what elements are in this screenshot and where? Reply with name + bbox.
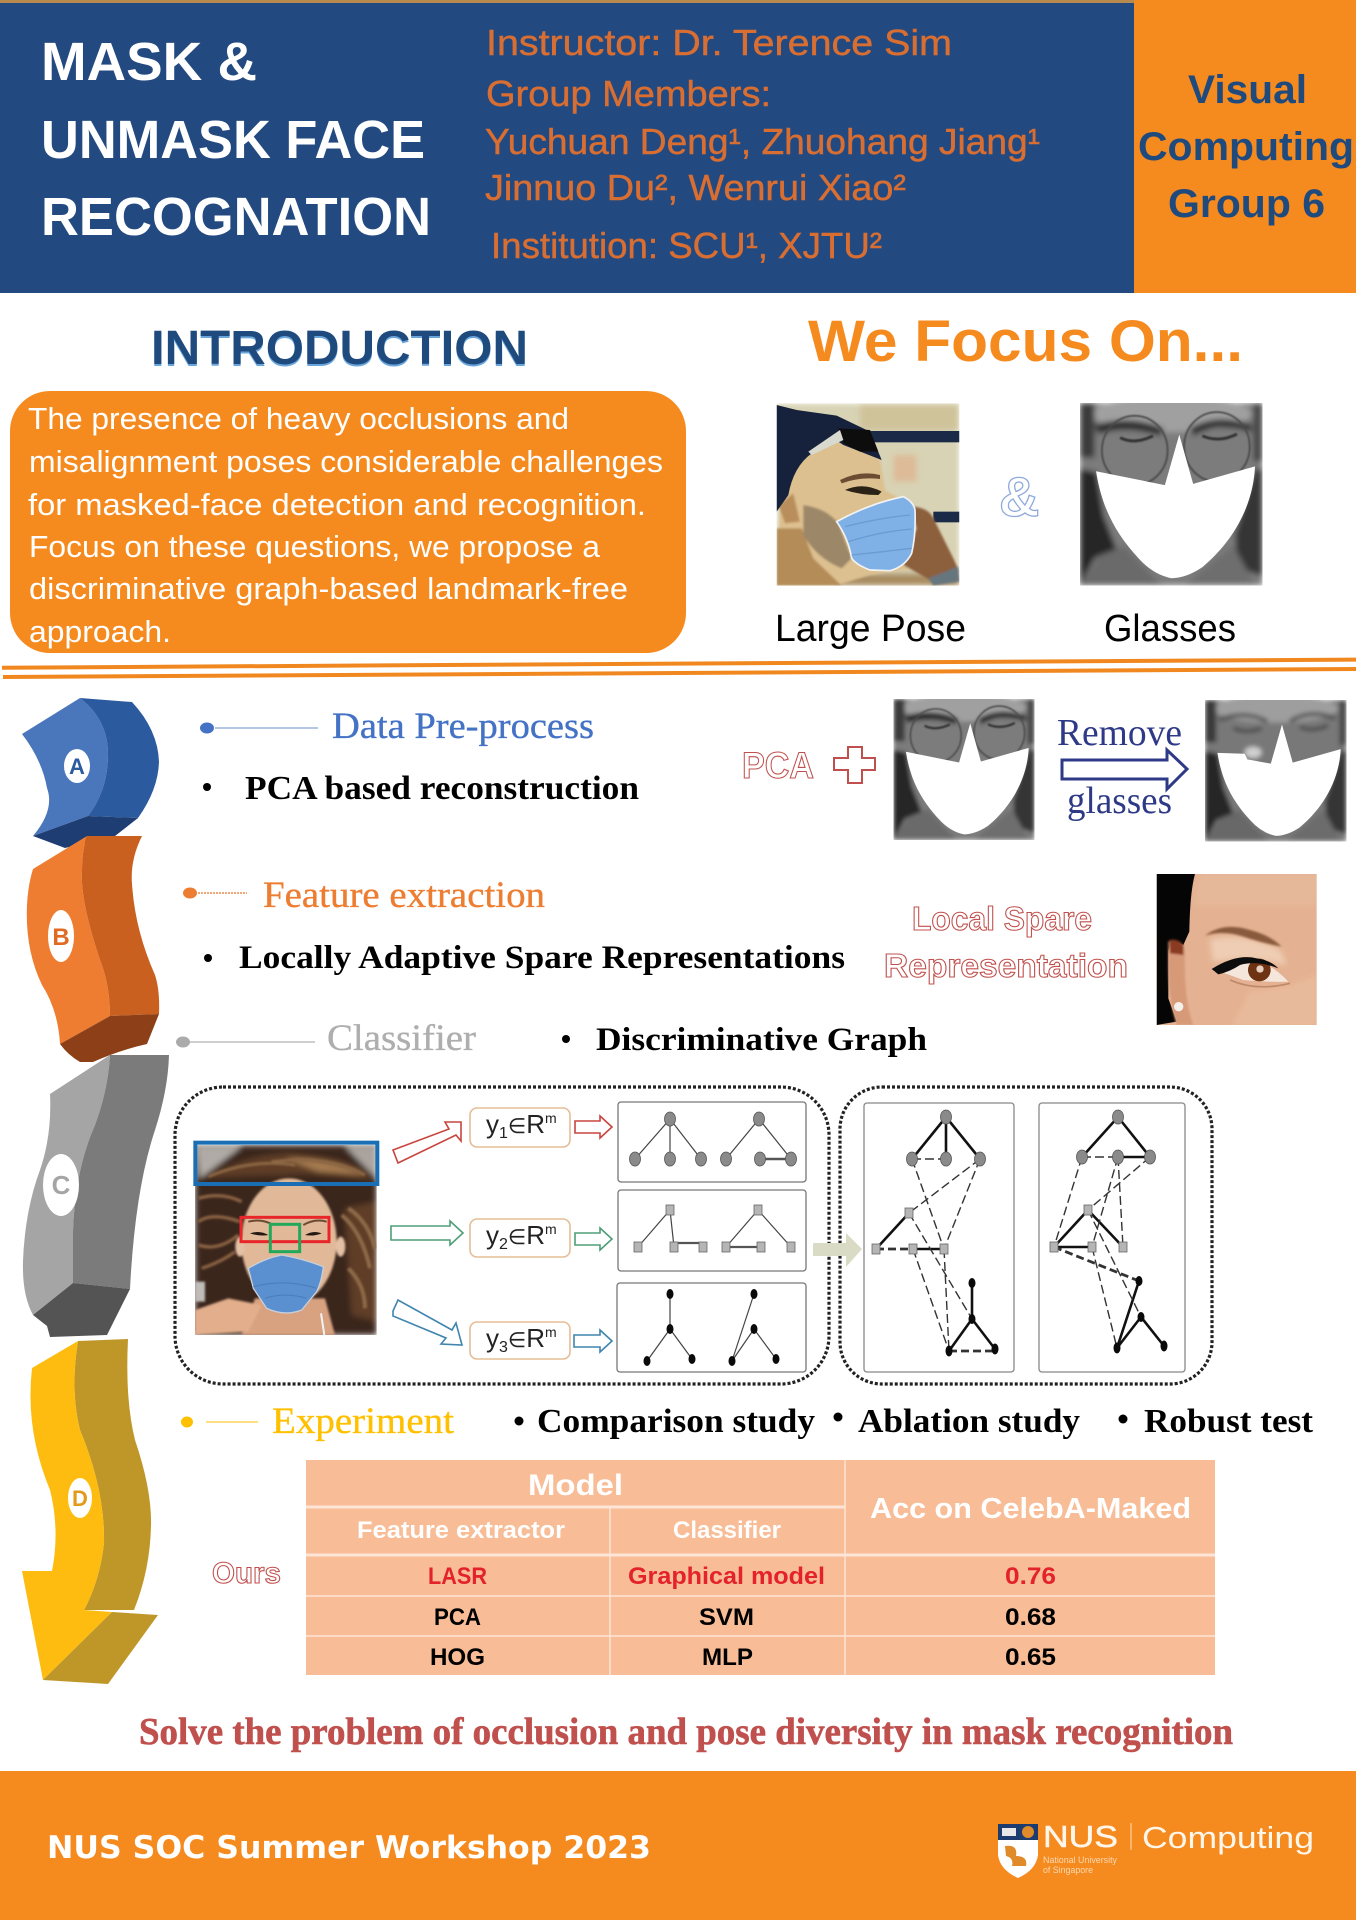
box: y1 [470,1108,570,1147]
box: y3: R [526,1323,545,1353]
instructor and members: Instructor: Dr. Terence Sim [486,22,952,63]
photo: face after glasses removal [1205,694,1346,842]
icon: ampersand: & [999,465,1039,528]
merged graph two [1039,1103,1185,1372]
arrow: y3 to graph [574,1330,612,1352]
heading: introduction: INTRODUCTION [151,322,528,375]
section D: experiment heading [181,1401,455,1442]
label: local spare representation [884,900,1128,984]
divider lines [2,660,1356,677]
logo: NUS Computing: NUS [1043,1819,1118,1854]
icon: plus [834,747,875,783]
box: y1: R [526,1109,545,1139]
arrow: blue to y3 [393,1300,462,1345]
conclusion statement: Solve the problem of occlusion and pose diversity in mask recognition [139,1711,1233,1753]
section A: bullet: PCA based reconstruction [245,770,639,807]
group label: Visual [1188,68,1307,112]
arrow: y1 to graph [575,1116,612,1138]
arrow: green to y2 [391,1221,463,1245]
results table: Graphical model [628,1563,825,1590]
title: MASK & [41,32,257,92]
photo: masked face with glasses [1080,396,1262,586]
section D: study bullets [514,1403,1314,1440]
label: PCA: PCA [742,745,814,786]
results table: Feature extractor [357,1517,565,1544]
box: y2: y [486,1220,499,1250]
caption: large pose: Large Pose [775,608,966,650]
box: y3 [470,1322,570,1359]
header band [0,0,1356,293]
box: y3: 3 [499,1339,508,1356]
results table: 0.76 [1005,1563,1056,1590]
step icon: B: B [52,924,70,951]
box: y2: 2 [499,1236,508,1253]
merged graph one [864,1103,1014,1372]
instructor and members: Jinnuo Du², Wenrui Xiao² [485,167,906,208]
photo: woman with mask and regions [195,1143,377,1335]
box: y1: y [486,1109,499,1139]
results table: PCA [434,1604,481,1631]
instructor and members [485,22,1040,266]
graph panel: circles [618,1102,806,1182]
step icon: D [22,1339,158,1684]
step icon: D: D [72,1486,88,1511]
photo: face before glasses removal [894,693,1034,840]
section C: classifier heading [176,1018,476,1059]
label: remove glasses with arrow [1057,712,1187,822]
section C: classifier heading: Classifier [327,1018,476,1059]
instructor and members: Group Members: [486,73,771,114]
logo: NUS Computing [998,1819,1314,1878]
graph panel: dots [617,1283,806,1372]
results table: 0.65 [1005,1644,1056,1671]
panel: introduction text: for masked-face detection and recognition. [28,487,646,522]
label: local spare representation: Local Spare [912,900,1092,937]
step icon: C [23,1055,169,1337]
box: y1: ∈ [508,1115,526,1138]
results table: LASR [428,1563,487,1590]
section A: data pre-process heading [200,706,594,747]
label: local spare representation: Representation [884,947,1128,984]
results table: HOG [430,1644,485,1671]
arrow: y2 to graph [575,1228,612,1250]
box: y3: ∈ [508,1329,526,1352]
section D: study bullets: Comparison study [537,1403,815,1440]
instructor and members: Institution: SCU¹, XJTU² [491,225,882,266]
panel: introduction text: The presence of heavy occlusions and [28,401,569,436]
box: y1: 1 [499,1125,508,1142]
results table: 0.68 [1005,1604,1056,1631]
step icon: B [27,836,159,1062]
logo: NUS Computing: National University [1043,1855,1117,1865]
results table: Model [528,1469,623,1502]
panel: graph model left [175,1087,829,1384]
group label: Computing [1138,125,1354,169]
arrow: merge into joint graph [813,1233,862,1267]
title: RECOGNATION [41,187,431,247]
step icon: A: A [69,754,85,779]
box: y2: m [545,1221,557,1237]
results table [306,1460,1215,1675]
label: remove glasses with arrow: Remove [1057,712,1182,754]
panel: introduction text: discriminative graph-based landmark-free [29,571,628,606]
box: y2: R [526,1220,545,1250]
step icon: A [22,698,159,848]
section D: study bullets: Ablation study [858,1403,1080,1440]
results table: Acc on CelebA-Maked [870,1493,1191,1525]
section C: bullet: Discriminative Graph [596,1022,927,1058]
box: y3: y [486,1323,499,1353]
results table: SVM [699,1604,754,1631]
footer text: NUS SOC Summer Workshop 2023 [47,1830,651,1866]
title [41,32,431,247]
logo: NUS Computing: of Singapore [1043,1865,1093,1875]
section B: feature extraction heading: Feature extraction [263,875,545,916]
panel: introduction text: misalignment poses considerable challenges [29,444,663,479]
section D: study bullets: Robust test [1144,1403,1314,1440]
section B: bullet: Locally Adaptive Spare Representations [239,940,845,976]
graph panel: squares [618,1190,806,1271]
section A: data pre-process heading: Data Pre-process [332,706,594,747]
group label: Group 6 [1168,182,1325,226]
box: y3: m [545,1324,557,1340]
box: y2 [470,1219,570,1257]
box: y1: m [545,1110,557,1126]
label: ours: Ours [212,1557,281,1590]
label: remove glasses with arrow: glasses [1067,780,1172,822]
step icon: C: C [52,1170,71,1200]
caption: glasses: Glasses [1104,608,1236,650]
panel: graph model right [840,1087,1212,1384]
group label [1138,68,1354,226]
results table: Classifier [673,1517,781,1544]
photo: eye close-up [1156,874,1317,1025]
heading: we focus on: We Focus On... [808,309,1243,374]
panel: introduction text: Focus on these questions, we propose a [29,529,601,564]
instructor and members: Yuchuan Deng¹, Zhuohang Jiang¹ [485,121,1040,162]
panel: introduction text [10,391,686,653]
title: UNMASK FACE [41,110,425,170]
section D: experiment heading: Experiment [272,1401,455,1442]
photo: man with mask, large pose [777,403,959,586]
arrow: red to y1 [393,1122,461,1163]
logo: NUS Computing: Computing [1142,1820,1314,1855]
footer band [0,1771,1356,1920]
panel: introduction text: approach. [29,614,171,649]
box: y2: ∈ [508,1226,526,1249]
results table: MLP [702,1644,753,1671]
